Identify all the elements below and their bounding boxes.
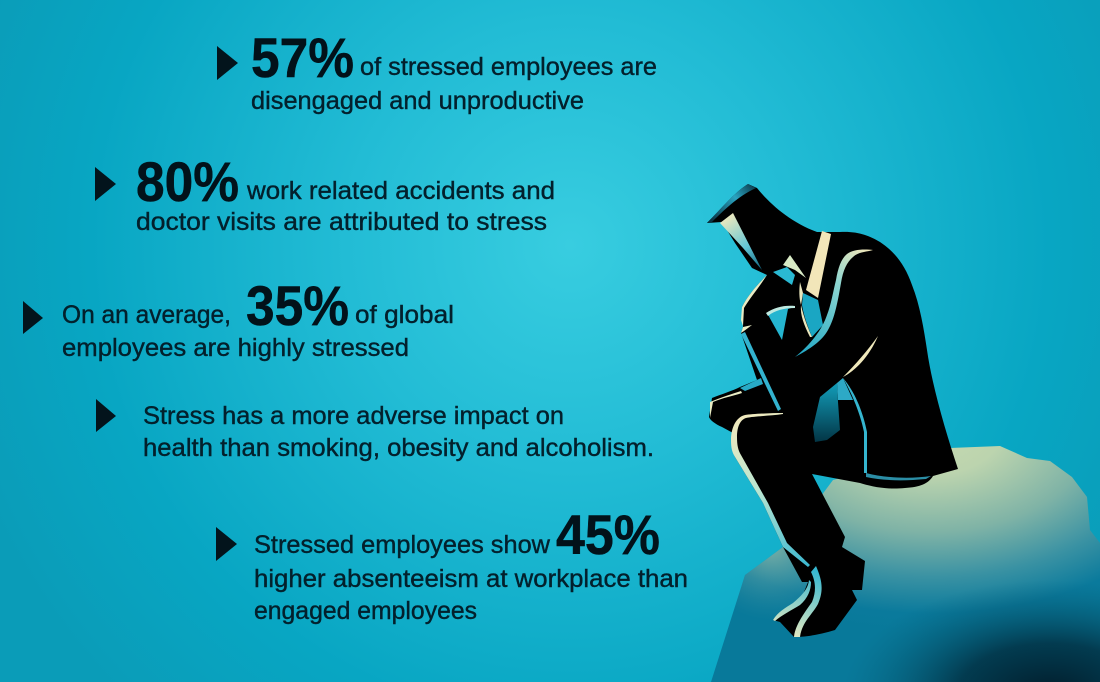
tie lower [813,383,840,442]
chin gap [773,267,795,285]
arrow marker [217,46,238,80]
stat: 57% disengaged [217,26,657,115]
tie [802,293,823,337]
text line: Stressed employees show [254,531,551,559]
illustration: thinking businessman silhouette [707,184,958,637]
arrow marker [95,167,116,201]
text line: On an average, [62,301,231,329]
stat: 80% accidents [95,150,555,236]
hand highlight [741,275,767,326]
thigh and shin highlight [731,413,810,567]
hat brim highlight [707,184,756,223]
text line: of global [355,301,454,329]
arrow marker [216,527,237,561]
figure 45%: 45% [556,503,660,566]
text line: doctor visits are attributed to stress [136,208,547,236]
forearm highlight [741,332,781,411]
text line: Stress has a more adverse impact on [143,402,564,430]
figure 80%: 80% [136,150,239,213]
text line: health than smoking, obesity and alcoholism. [143,434,654,462]
text line: engaged employees [254,597,477,625]
illustration: rock [711,446,1100,682]
stat: health impact [96,399,654,462]
sleeve blue band [740,378,763,391]
stat: 35% highly stressed [23,274,454,362]
text line: employees are highly stressed [62,334,409,362]
hand on knee highlight [710,391,742,418]
body silhouette [707,184,958,637]
text line: work related accidents and [246,177,555,205]
arm gap [767,307,794,340]
stat: 45% absenteeism [216,503,688,625]
jacket fold highlight [843,336,878,377]
face shadow highlight [720,213,762,270]
figure 57%: 57% [251,26,354,89]
text line: of stressed employees are [360,53,657,81]
text line: disengaged and unproductive [251,87,584,115]
jacket lapel highlight [795,249,873,357]
text line: higher absenteeism at workplace than [254,565,688,593]
jacket hem [866,473,931,480]
shirt collar [806,231,831,298]
inner jacket blue [837,378,853,400]
arrow marker [96,399,116,432]
shoe highlight [794,566,822,637]
arrow marker [23,301,43,334]
figure 35%: 35% [246,274,349,337]
shirt front [799,282,812,337]
